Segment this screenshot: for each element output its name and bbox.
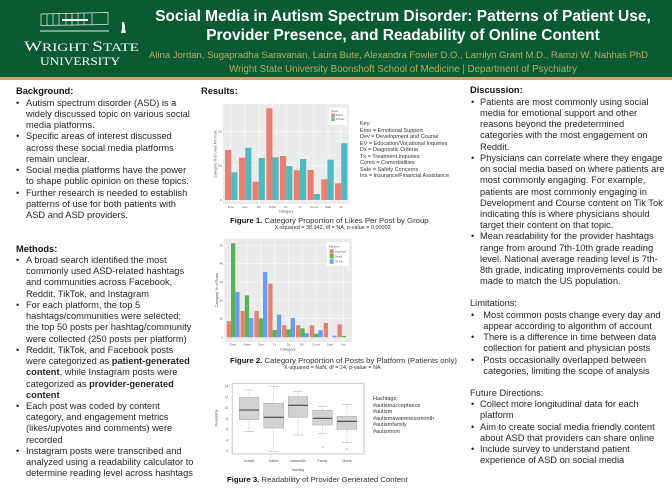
legend: platform: Tik Tok <box>335 260 344 264</box>
panel: future directions: Future Directions: <box>470 388 543 398</box>
panel: methods: For each platform, the top 5 <box>26 300 140 310</box>
panel: future directions: platform <box>480 410 514 420</box>
panel: methods: (likes/upvotes and comments) were <box>26 423 172 433</box>
panel: future directions: Aim to create social media friendly content <box>480 422 655 432</box>
panel: methods: Instagram posts were transcribed and <box>26 446 182 456</box>
header banner <box>0 0 672 80</box>
chart: figure 1 bar chart <box>214 104 349 214</box>
caption: figure 3: Figure 3. Readability of Provider Generated Content <box>227 474 408 484</box>
panel: discussion: indicating this is where physicians should <box>480 209 650 219</box>
panel: methods: Each post was coded by content <box>26 401 160 411</box>
legend: group: Patient <box>336 114 344 117</box>
panel: background: remain unclear. <box>26 154 90 164</box>
chart: figure 1 bar chart: Safe <box>325 205 331 209</box>
key: category abbreviations <box>360 121 449 179</box>
chart: figure 1 bar chart: 20 <box>218 130 222 134</box>
chart: figure 3 box plot: 10 <box>224 406 228 410</box>
chart: figure 3 box plot: 14 <box>224 384 228 388</box>
chart: figure 2 bar chart: Category % of Posts <box>215 273 219 307</box>
chart: figure 3 box plot: 2 <box>226 449 228 453</box>
panel: methods: were collected (250 posts per platform) <box>26 334 187 344</box>
panel: background: across these social media platforms <box>26 143 174 153</box>
panel: background: Background: <box>16 86 73 96</box>
chart: figure 3 box plot: 6 <box>226 428 228 432</box>
title: Social Media in Autism Spectrum Disorder: Patterns of Patient Use, <box>155 8 651 25</box>
chart: figure 3 box plot: 12 <box>224 395 228 399</box>
key: hashtags <box>373 396 434 435</box>
statistic: figure 2: X-squared = NaN, df = 24, p-value = NA <box>284 365 381 371</box>
panel: limitations: collection for patient and physician posts <box>483 343 650 353</box>
panel: methods: A broad search identified the most <box>26 255 167 265</box>
caption: figure 2: Figure 2. Category Proportion of Posts by Platform (Patients only) <box>230 356 457 364</box>
key: hashtags: #autismfamily <box>373 422 407 428</box>
legend: group <box>329 108 347 125</box>
panel: methods: Methods: <box>16 244 57 254</box>
chart: figure 3 box plot: 8 <box>226 417 228 421</box>
panel: methods: recorded <box>26 435 63 445</box>
panel: background: media platforms. <box>26 120 95 130</box>
panel: discussion: media for emotional support and other <box>480 108 637 118</box>
key: category abbreviations: EV = Education/Vocational Inquiries <box>360 141 447 147</box>
panel: methods <box>16 244 193 478</box>
panel: discussion: Mean readability for the provider hashtags <box>480 231 654 241</box>
logo: Wright State University <box>24 12 139 68</box>
gold rule <box>0 77 672 80</box>
key: category abbreviations: Como = Comorbidities <box>360 160 415 166</box>
chart: figure 1 bar chart: 0 <box>220 198 222 202</box>
panel: discussion: level. National average reading level is 7th- <box>480 254 658 264</box>
chart: figure 1 bar chart: Ins <box>339 205 343 209</box>
chart: figure 3 box plot: Accept <box>244 459 254 463</box>
caption: figure 1: Figure 1. Category Proportion of Likes Per Post by Group <box>230 216 429 224</box>
chart: figure 2 bar chart: Emo <box>230 342 236 346</box>
chart: figure 1 bar chart: Category <box>279 210 293 214</box>
chart: figure 2 bar chart: 20 <box>220 298 223 302</box>
panel: discussion: categories with the most engagement on <box>480 130 647 140</box>
key: hashtags: #autismom <box>373 429 400 435</box>
panel: discussion: Development and Course content on Tik Tok <box>480 198 663 208</box>
chart: figure 2 bar chart: Dev <box>258 342 264 346</box>
panel: background: widely discussed topic on various social <box>26 109 190 119</box>
key: category abbreviations: Emo = Emotional Support <box>360 128 423 134</box>
key: hashtags: #autism <box>373 409 392 415</box>
panel: background: Specific areas of interest discussed <box>26 131 172 141</box>
panel: methods: commonly used ASD-related hashtags <box>26 266 184 276</box>
panel: background: to shape public opinion on these topics. <box>26 176 189 186</box>
key: category abbreviations: Tx = Treatment Inquiries <box>360 154 419 160</box>
panel: discussion: Patients are most commonly using social <box>480 97 648 107</box>
panel: future directions: Include survey to understand patient <box>480 444 630 454</box>
panel: discussion: made to match the US population. <box>480 276 621 286</box>
panel: methods: Reddit, TikTok, and Instagram <box>26 289 149 299</box>
authors: Alina Jordan, Sugapradha Saravanan, Laura Bute, Alexandra Fowler D.O., Larrilyn Grant M.D., Ramzi W. Nahhas PhD <box>149 50 648 60</box>
key: hashtags: Hashtags: <box>373 396 398 402</box>
chart: figure 2 bar chart: Category <box>280 348 296 352</box>
title <box>155 8 651 44</box>
legend: group: Provider <box>336 118 345 121</box>
chart: figure 1 bar chart: Dx <box>284 205 288 209</box>
key: hashtags: #autismawarenessmonth <box>373 416 434 422</box>
legend: platform <box>327 242 349 266</box>
panel: discussion: on social media based on where patients are <box>480 164 665 174</box>
heading: results: Results: <box>201 86 238 96</box>
chart: figure 1 bar chart: Dev <box>242 205 248 209</box>
chart: figure 2 bar chart: Tx <box>273 342 277 346</box>
chart: figure 1 bar chart: Category % of Likes Per Post <box>214 131 218 177</box>
key: category abbreviations: Ins = Insurance/Financial Assistance <box>360 173 449 179</box>
chart: figure 2 bar chart: EV <box>300 342 304 346</box>
chart: figure 3 box plot: Hashtag <box>292 468 304 472</box>
chart: figure 3 box plot: Family <box>318 459 328 463</box>
legend: platform: Platform <box>329 244 340 248</box>
panel: methods: and communities across Facebook, <box>26 277 172 287</box>
panel: limitations: There is a difference in time between data <box>483 332 656 342</box>
panel: future directions <box>470 388 655 465</box>
chart: figure 2 bar chart: Other <box>243 342 251 346</box>
panel: methods: content <box>26 390 60 400</box>
panel: discussion: range from around 7th-10th grade reading <box>480 243 653 253</box>
chart: figure 3 box plot: AwareMth <box>290 459 306 463</box>
panel: discussion: patients are most commonly engaging in <box>480 186 647 196</box>
panel: background: patterns of use for both patients with <box>26 199 176 209</box>
title: Provider Presence, and Readability of Online Content <box>206 27 600 44</box>
chart: figure 2 bar chart: Safe <box>327 342 333 346</box>
panel: discussion: Reddit. <box>480 142 509 152</box>
key: category abbreviations: Dx = Diagnostic Criteria <box>360 147 418 153</box>
legend: platform: Facebook <box>335 250 347 254</box>
chart: figure 1 bar chart: Emo <box>228 205 234 209</box>
panel: background: Social media platforms have the power <box>26 165 186 175</box>
panel: limitations: categories, limiting the scope of analysis <box>483 366 650 376</box>
panel: limitations: Posts occasionally overlapped between <box>483 355 646 365</box>
chart: figure 1 bar chart: Como <box>310 205 318 209</box>
panel: discussion: most commonly engaging. For example, <box>480 175 645 185</box>
panel: discussion: Physicians can correlate where they engage <box>480 153 662 163</box>
logo: Wright State University: W RIGHT STATE <box>24 39 139 55</box>
chart: figure 2 bar chart <box>215 238 352 352</box>
chart: figure 1 bar chart: Tx <box>298 205 302 209</box>
chart: figure 3 box plot: Readability <box>214 409 218 426</box>
chart: figure 2 bar chart: 30 <box>220 280 223 284</box>
chart: figure 3 box plot: Autism <box>269 459 279 463</box>
chart: figure 2 bar chart: 0 <box>221 335 223 339</box>
panel: limitations <box>470 298 661 376</box>
panel: methods: determine reading level across hashtags <box>26 468 193 478</box>
panel: discussion: 8th grade, indicating improvements could be <box>480 265 662 275</box>
panel: methods: hashtags/communities were selected; <box>26 311 181 321</box>
panel: methods: analyzed using a readability calculator to <box>26 457 193 467</box>
panel: future directions: Collect more longitudinal data for each <box>480 399 639 409</box>
key: hashtags: #autismacceptance <box>373 403 420 409</box>
panel: methods: categorized as provider-generated <box>26 378 174 388</box>
panel: methods: the top 50 posts per hashtag/community <box>26 322 191 332</box>
chart: figure 1 bar chart: 10 <box>218 164 222 168</box>
chart: figure 2 bar chart: Dx <box>287 342 291 346</box>
panel: methods: category, and engagement metrics <box>26 412 168 422</box>
key: category abbreviations: Key: <box>360 121 371 127</box>
panel: methods: were categorized as patient-generated <box>26 356 190 366</box>
panel: methods: content, while Instagram posts were <box>26 367 177 377</box>
panel: background: Autism spectrum disorder (ASD) is a <box>26 98 176 108</box>
panel: background: ASD and ASD providers. <box>26 210 128 220</box>
affiliation: Wright State University Boonshoft School of Medicine | Department of Psychiatry <box>229 64 577 74</box>
panel: background <box>16 86 190 220</box>
statistic: figure 1: X-squared = 38.342, df = NA, p-value = 0.00002 <box>275 225 391 231</box>
panel: methods: Reddit, TikTok, and Facebook posts <box>26 345 173 355</box>
chart: figure 2 bar chart: 50 <box>220 243 223 247</box>
panel: limitations: Most common posts change every day and <box>483 310 661 320</box>
chart: figure 3 box plot: 4 <box>226 438 228 442</box>
panel: discussion: target their content on that topic. <box>480 220 613 230</box>
chart: figure 1 bar chart: EV <box>257 205 261 209</box>
key: category abbreviations: Safe = Safety Concerns <box>360 167 418 173</box>
chart: figure 3 box plot <box>214 382 364 472</box>
chart: figure 3 box plot: Moms <box>342 459 352 463</box>
panel: limitations: appear according to algorithm of account <box>483 321 652 331</box>
chart: figure 2 bar chart: Como <box>312 342 320 346</box>
panel: discussion: reasons beyond the predetermined <box>480 119 624 129</box>
chart: figure 2 bar chart: 40 <box>220 262 223 266</box>
legend: platform: Reddit <box>335 255 343 258</box>
key: category abbreviations: Dev = Development and Course <box>360 134 438 140</box>
logo: Wright State University: UNIVERSITY <box>40 56 121 68</box>
panel: discussion: Discussion: <box>470 85 523 95</box>
chart: figure 1 bar chart: Other <box>269 205 276 209</box>
panel: limitations: Limitations: <box>470 298 517 308</box>
panel: future directions: experience of ASD on social media <box>480 455 624 465</box>
chart: figure 2 bar chart: 10 <box>220 317 223 321</box>
panel: background: Further research is needed to establish <box>26 188 187 198</box>
chart: figure 2 bar chart: Ins <box>341 342 346 346</box>
panel: discussion <box>470 85 665 286</box>
panel: future directions: about ASD that providers can share online <box>480 433 654 443</box>
legend: group: Group <box>331 109 339 113</box>
